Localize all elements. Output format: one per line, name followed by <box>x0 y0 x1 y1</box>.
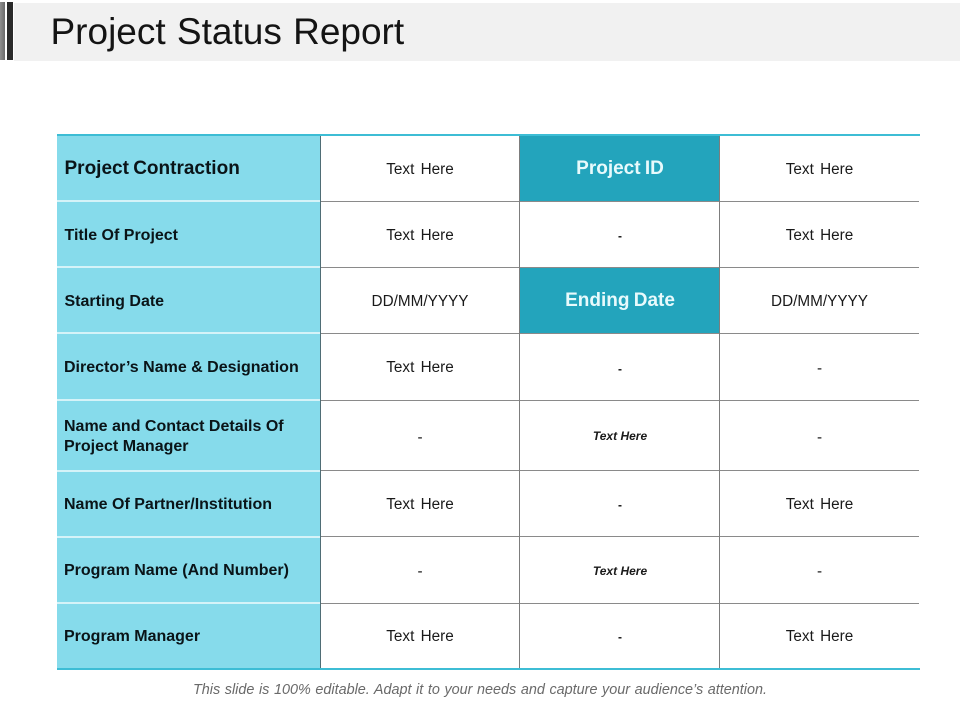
cell: row 7 col 1: - <box>417 563 423 580</box>
row label: Title Of Project: Title Of Project <box>64 227 178 244</box>
cell: row 4 col 2: - <box>618 362 622 376</box>
title background <box>14 3 960 61</box>
highlight cell: Project ID <box>520 135 720 201</box>
cell: row 5 col 1: - <box>417 429 423 446</box>
cell: row 5 col 2: Text Here <box>593 429 647 443</box>
cell: row 8 col 2: - <box>618 630 622 644</box>
cell: row 8 col 1: Text Here <box>386 628 454 645</box>
row label: Starting Date: Starting Date <box>64 293 164 310</box>
heading cell: Project ID: Project ID <box>576 158 664 179</box>
accent bar: dark <box>7 2 13 60</box>
row label: Program Name (And Number): Program Name (And Number) <box>64 562 289 579</box>
row label: Director's Name & Designation: Director’s Name & Designation <box>64 359 299 376</box>
row label: Name and Contact Details Of Project Manager: Project Manager <box>64 438 188 455</box>
row label: Project Contraction: Project Contraction <box>64 158 240 179</box>
cell: row 2 col 3: Text Here <box>786 227 853 244</box>
title: Project Status Report <box>50 11 404 52</box>
cell: row 8 col 3: Text Here <box>786 628 853 645</box>
cell: row 2 col 1: Text Here <box>386 227 454 244</box>
label column background <box>57 135 320 669</box>
cell: row 3 col 3: DD/MM/YYYY <box>771 293 868 310</box>
heading cell: Ending Date: Ending Date <box>565 290 675 311</box>
cell: row 7 col 3: - <box>817 563 822 580</box>
highlight cell: Ending Date <box>520 267 720 333</box>
accent bar: grey <box>0 2 5 60</box>
cell: row 2 col 2: - <box>618 229 622 243</box>
footer note: This slide is 100% editable. Adapt it to your needs and capture your audience’s attention. <box>193 682 767 698</box>
row label: Name and Contact Details Of Project Manager: Name and Contact Details Of <box>64 418 284 435</box>
cell: row 6 col 1: Text Here <box>386 496 454 513</box>
cell: row 6 col 3: Text Here <box>786 496 853 513</box>
cell: row 4 col 1: Text Here <box>386 359 454 376</box>
header band <box>0 2 960 61</box>
cell: row 3 col 1: DD/MM/YYYY <box>372 293 468 310</box>
cell: row 1 col 3: Text Here <box>786 161 853 178</box>
row label: Name Of Partner/Institution: Name Of Partner/Institution <box>64 496 272 513</box>
cell: row 6 col 2: - <box>618 498 622 512</box>
row label: Name and Contact Details Of Project Manager <box>64 418 284 455</box>
cell: row 5 col 3: - <box>817 429 822 446</box>
cell: row 7 col 2: Text Here <box>593 564 647 578</box>
cell: row 4 col 3: - <box>817 360 822 377</box>
row label: Program Manager: Program Manager <box>64 628 200 645</box>
cell: row 1 col 1: Text Here <box>386 161 454 178</box>
